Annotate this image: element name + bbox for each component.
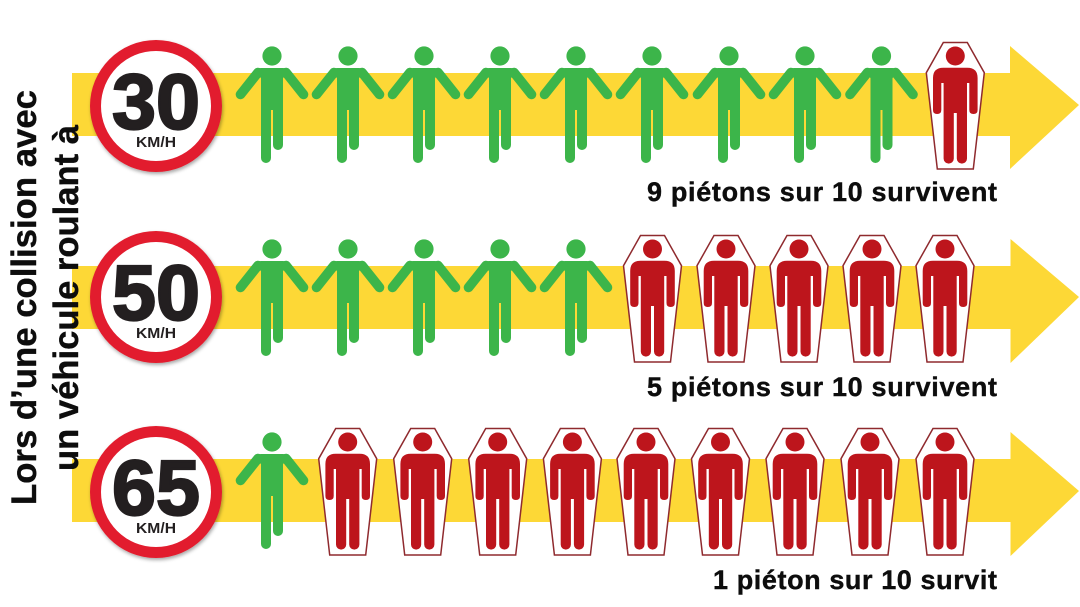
icon: coffin 9 [916, 428, 974, 555]
icon: coffin 3 [469, 428, 527, 555]
icon: survivor 7 [698, 46, 760, 163]
icon: survivor 2 [316, 46, 380, 163]
icon: coffin 5 [617, 428, 675, 555]
speed sign: 65 km/h [90, 426, 222, 558]
icon: coffin 2 [394, 428, 452, 555]
icon: coffin 2 [697, 236, 755, 362]
icon: survivor 4 [468, 46, 532, 163]
arrow: row 50 [72, 239, 1079, 363]
speed sign: 65 km/h: KM/H [136, 520, 176, 537]
caption: row 50: 5 piétons sur 10 survivent [647, 372, 997, 402]
icon: coffin 1 [319, 428, 377, 555]
icon: survivor 3 [392, 46, 456, 163]
caption: row 30: 9 piétons sur 10 survivent [647, 177, 997, 207]
icon: survivor 1 [240, 46, 304, 163]
icon: survivor 5 [544, 239, 608, 356]
speed sign: 50 km/h: 50 [112, 248, 200, 336]
speed sign: 65 km/h: 65 [112, 444, 200, 532]
icon: survivor 3 [392, 239, 456, 356]
speed sign: 50 km/h [90, 231, 222, 363]
panel: row 50 km/h [72, 231, 1079, 402]
icon: coffin 1 [624, 236, 682, 362]
icon: survivor 9 [850, 46, 913, 163]
speed sign: 30 km/h [90, 40, 222, 172]
panel: row 30 km/h [72, 40, 1079, 207]
icon: coffin 7 [766, 428, 824, 555]
vertical title: un véhicule roulant à [47, 124, 86, 471]
vertical title: Lors d’une collision avec [5, 90, 44, 505]
arrow: row 65 [72, 432, 1079, 556]
icon: coffin 6 [692, 428, 750, 555]
vertical title [5, 90, 86, 505]
icon: coffin 8 [841, 428, 899, 555]
panel: row 65 km/h [72, 426, 1079, 595]
icon: survivor 1 [240, 239, 304, 356]
icon: survivor 5 [544, 46, 608, 163]
speed sign: 30 km/h: 30 [112, 58, 200, 146]
icon: coffin 4 [543, 428, 601, 555]
icon: survivor 2 [316, 239, 380, 356]
icon: survivor 4 [468, 239, 532, 356]
icon: coffin 5 [916, 236, 974, 362]
speed sign: 50 km/h: KM/H [136, 325, 176, 342]
arrow: row 30 [72, 46, 1079, 169]
icon: survivor 1 [240, 432, 304, 549]
caption: row 65: 1 piéton sur 10 survit [713, 565, 997, 595]
icon: coffin 3 [770, 236, 828, 362]
icon: survivor 6 [620, 46, 684, 163]
icon: coffin 4 [843, 236, 901, 362]
icon: coffin 1 [926, 42, 984, 169]
icon: survivor 8 [774, 46, 836, 163]
speed sign: 30 km/h: KM/H [136, 134, 176, 151]
